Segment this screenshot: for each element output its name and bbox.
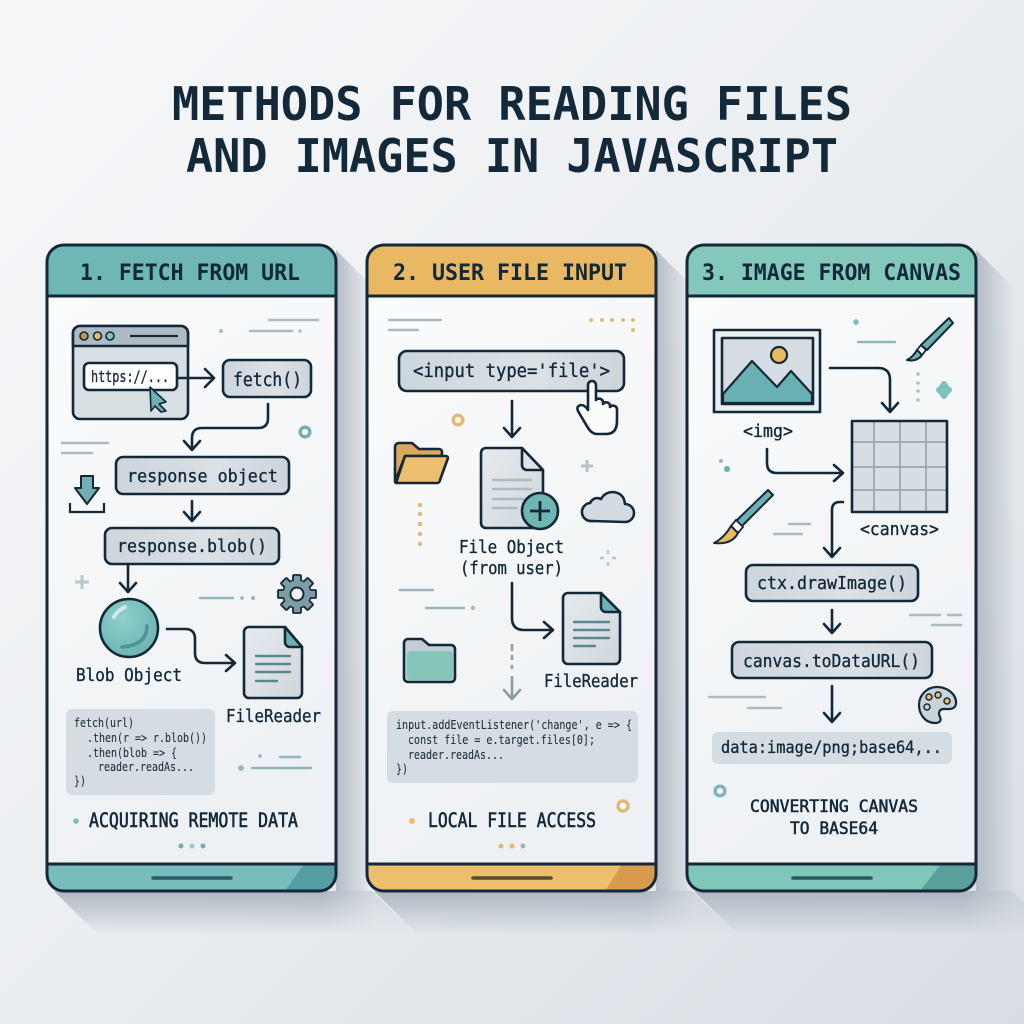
- arrow: img to canvas: [830, 368, 898, 412]
- icon: file: [563, 593, 620, 664]
- drawImage box: [746, 565, 918, 601]
- code block: reader.readAs...: [98, 759, 194, 774]
- icon: browser window: [73, 326, 188, 419]
- arrow: file object to filereader: [512, 583, 553, 638]
- icon: download: [70, 476, 104, 512]
- caption: converting canvas to base64: [750, 797, 918, 839]
- code block: .then(blob => {: [87, 745, 177, 760]
- arrow: blob call to blob object: [120, 564, 136, 592]
- arrow: fetch to response: [184, 404, 268, 450]
- icon: file with plus: [481, 448, 558, 529]
- panel: 3. image from canvas: [687, 245, 976, 891]
- panel 2 footer: [367, 864, 656, 891]
- caption: local file access: LOCAL FILE ACCESS: [428, 809, 596, 832]
- label: file object: (from user): [460, 559, 563, 579]
- panel 2 header: [367, 245, 656, 296]
- icon: open folder: [395, 443, 448, 483]
- icon: gear: [278, 575, 316, 613]
- toDataURL box: canvas.toDataURL(): [743, 651, 920, 672]
- label: blob object: Blob Object: [76, 666, 182, 686]
- icon: teal folder: [404, 639, 455, 682]
- title: METHODS FOR READING FILES: [172, 77, 852, 131]
- code block: .then(r => r.blob()): [87, 730, 207, 745]
- fetch box: [223, 360, 311, 397]
- icon: pointing hand: [577, 381, 617, 434]
- icon: sparkle: [939, 384, 949, 396]
- arrow: input to file: [504, 401, 520, 437]
- code block: }): [74, 773, 86, 788]
- arrow: img label to canvas: [767, 449, 843, 481]
- arrow: blob to filereader: [167, 629, 235, 671]
- data url box: data:image/png;base64,..: [721, 738, 942, 757]
- code block: const file = e.target.files[0];: [408, 732, 595, 747]
- label: filereader: FileReader: [226, 706, 321, 727]
- drawImage box: ctx.drawImage(): [757, 573, 907, 594]
- code block: [387, 711, 638, 783]
- arrow: url to fetch: [178, 369, 214, 387]
- title: AND IMAGES IN JAVASCRIPT: [186, 129, 838, 183]
- response object box: [116, 457, 289, 494]
- icon: picture: [714, 330, 820, 412]
- icon: browser window: https://...: [91, 367, 169, 386]
- icon: blob sphere: [100, 599, 158, 657]
- code block: input.addEventListener('change', e => {: [396, 717, 632, 732]
- code block: reader.readAs...: [408, 747, 504, 762]
- panel 1 header: [47, 245, 336, 296]
- arrow: response to blob: [184, 501, 200, 521]
- arrow: canvas to drawImage: [824, 502, 843, 557]
- code block: [66, 709, 215, 795]
- input element box: [399, 351, 624, 391]
- caption: converting canvas to base64: TO BASE64: [790, 819, 878, 839]
- response.blob box: response.blob(): [117, 536, 267, 557]
- icon: paintbrush lower: [714, 490, 773, 543]
- panel: 2. user file input: [367, 245, 656, 891]
- label: filereader: FileReader: [544, 671, 638, 692]
- label: file object: [459, 538, 564, 579]
- response.blob box: [105, 528, 279, 564]
- arrow: toDataURL to data url: [824, 686, 840, 722]
- arrow: drawImage to toDataURL: [824, 610, 840, 633]
- icon: file: [244, 627, 302, 698]
- arrow: dashed grey: [504, 645, 520, 699]
- code block: }): [396, 761, 408, 776]
- caption: acquiring remote data: ACQUIRING REMOTE DATA: [89, 809, 298, 832]
- panel 1 header: 1. FETCH FROM URL: [80, 261, 300, 286]
- code block: fetch(url): [74, 715, 134, 730]
- label: img: <img>: [743, 422, 793, 442]
- icon: paintbrush top: [907, 318, 953, 360]
- icon: palette: [919, 687, 956, 723]
- panel 3 header: [687, 245, 976, 296]
- label: file object: File Object: [459, 538, 564, 558]
- response object box: response object: [127, 466, 278, 487]
- panel 2 header: 2. USER FILE INPUT: [393, 261, 627, 286]
- data url box: [712, 732, 952, 764]
- label: canvas: <canvas>: [860, 520, 939, 540]
- toDataURL box: [732, 642, 932, 678]
- panel 3 footer: [687, 864, 976, 891]
- caption: converting canvas to base64: CONVERTING CANVAS: [750, 797, 918, 817]
- panel 3 header: 3. IMAGE FROM CANVAS: [702, 261, 961, 286]
- panel: 1. fetch from URL: [47, 245, 336, 891]
- title: [172, 77, 852, 183]
- icon: cloud: [582, 492, 634, 522]
- fetch box: fetch(): [233, 370, 302, 391]
- input element box: <input type='file'>: [413, 361, 610, 382]
- icon: canvas grid: [852, 421, 947, 512]
- panel 1 footer: [47, 864, 336, 891]
